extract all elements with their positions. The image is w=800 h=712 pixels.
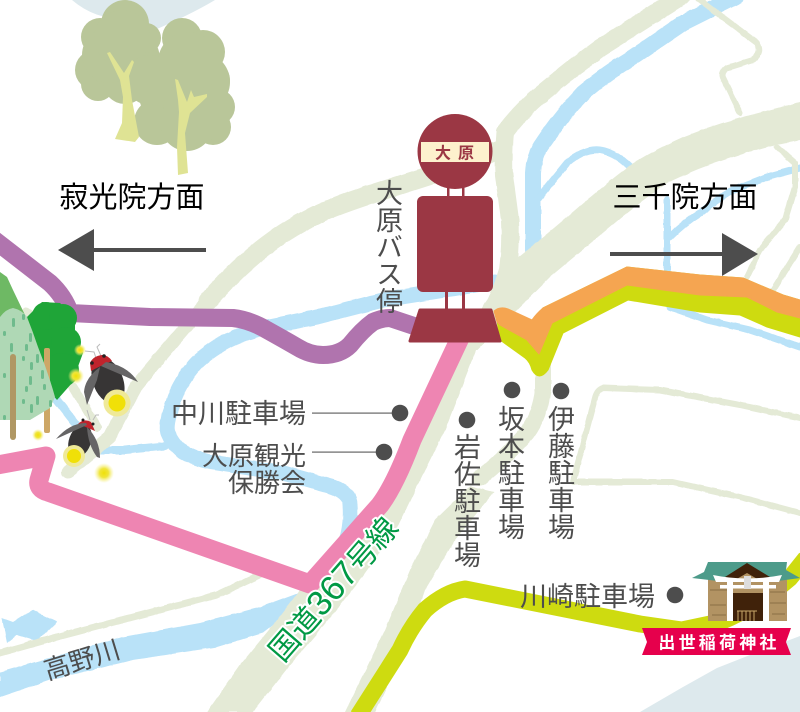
water area: bottom right bbox=[640, 636, 800, 712]
road: south branch bbox=[480, 360, 543, 478]
banner: shrine name bbox=[642, 628, 791, 655]
label: Ito parking: 伊藤駐車場 bbox=[544, 405, 574, 540]
road: vertical bbox=[490, 132, 510, 312]
bus stop sign bbox=[410, 114, 500, 341]
icon: firefly upper bbox=[84, 344, 138, 416]
water area: top bbox=[72, 0, 215, 32]
label: Sakamoto parking: 坂本駐車場 bbox=[494, 405, 524, 540]
leader: Nakagawa bbox=[312, 405, 408, 421]
label: tourism association: 大原観光 bbox=[202, 441, 306, 471]
label: bus stop: 大原バス停 bbox=[372, 179, 402, 314]
route: lime lower bbox=[358, 558, 800, 712]
sign text: 大原 bbox=[435, 144, 481, 162]
arrow: left bbox=[58, 229, 206, 271]
marker: Ito bbox=[553, 383, 569, 399]
label: Nakagawa parking: 中川駐車場 bbox=[171, 399, 306, 429]
icon: firefly glows bbox=[32, 344, 114, 483]
river: branches bbox=[538, 150, 800, 347]
road: left branch bbox=[208, 150, 498, 301]
arrow: right bbox=[610, 233, 758, 276]
icon: green trees bbox=[0, 272, 83, 440]
road: upper branch bbox=[505, 0, 682, 132]
marker: Iwasa bbox=[459, 412, 475, 428]
marker: Kawasaki bbox=[667, 587, 683, 603]
road: thin lane southwest bbox=[0, 574, 262, 653]
road: thin lanes bbox=[573, 0, 800, 513]
route: orange bbox=[494, 267, 800, 354]
label: Iwasa parking: 岩佐駐車場 bbox=[450, 433, 480, 568]
heading: left direction: 寂光院方面 bbox=[59, 181, 205, 214]
icon: shrine bbox=[692, 562, 800, 621]
sign band bbox=[421, 142, 489, 162]
river: middle bbox=[167, 282, 495, 552]
icon: fish bbox=[2, 610, 57, 643]
route: lime upper bbox=[497, 267, 800, 376]
marker: Sakamoto bbox=[504, 382, 520, 398]
label: Takano river: 高野川 bbox=[40, 634, 124, 686]
leader: tourism association bbox=[312, 444, 392, 460]
icon: firefly lower bbox=[56, 410, 100, 467]
road: national route 367 bbox=[207, 345, 478, 712]
label: tourism association line 2: 保勝会 bbox=[228, 468, 306, 498]
icon: pale trees bbox=[75, 0, 235, 175]
river: upper bbox=[533, 0, 737, 250]
torii bbox=[713, 575, 782, 621]
route: pink bbox=[0, 338, 460, 584]
label: Kawasaki parking: 川崎駐車場 bbox=[520, 582, 655, 612]
heading: right direction: 三千院方面 bbox=[612, 181, 758, 214]
road: main wide to the right bbox=[462, 102, 800, 350]
route: purple bbox=[0, 238, 420, 355]
river: side branch bbox=[57, 400, 165, 450]
label: national route 367: 国道367号線 bbox=[259, 509, 406, 669]
banner: shrine name: 出世稲荷神社 bbox=[658, 634, 780, 652]
river: Takano bbox=[0, 545, 358, 697]
